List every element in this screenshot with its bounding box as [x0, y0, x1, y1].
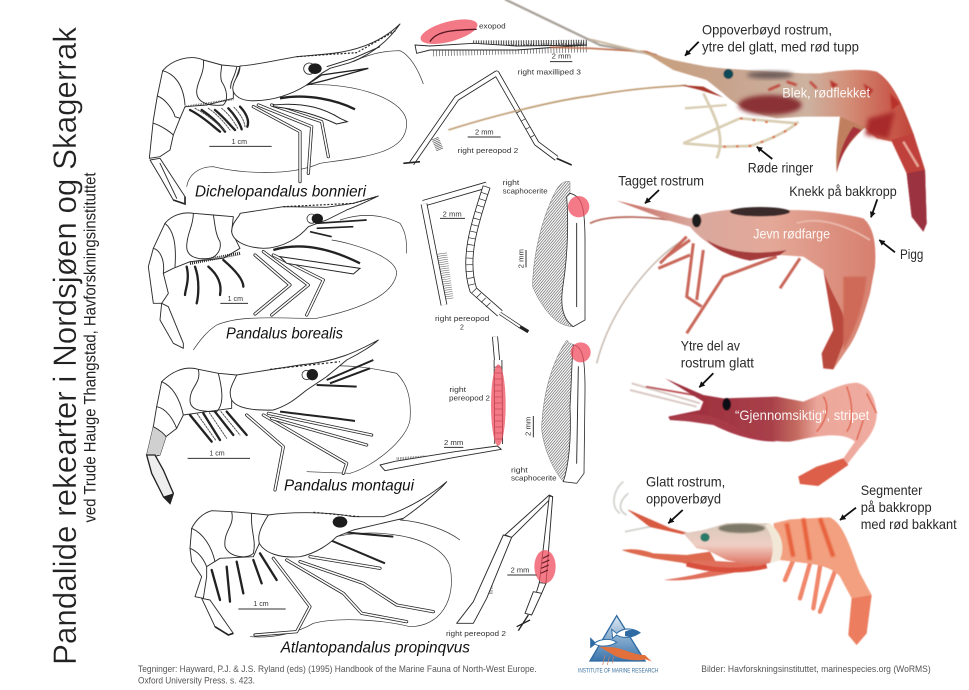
drawing: Pandalus montagui	[147, 340, 410, 503]
appendage: right pereopod 2 (P. montagui): pereopod 2	[449, 396, 490, 403]
species name: Atlantopandalus propinqvus: Atlantopandalus propinqvus	[280, 640, 470, 657]
appendage: right scaphocerite (P. borealis): right	[503, 180, 519, 187]
drawing: Pandalus borealis: 1 cm	[228, 296, 243, 303]
appendage: right pereopod 2 (D. bonnieri): 2 mm	[475, 129, 494, 136]
label: Glatt rostrum, oppoverbøyd: Glatt rostrum,	[646, 474, 725, 490]
appendage: right pereopod 2 (D. bonnieri)	[403, 73, 572, 165]
appendage: right maxilliped 3 with exopod: right maxilliped 3	[518, 69, 581, 76]
appendage: right scaphocerite (P. montagui)	[511, 340, 591, 483]
appendage: right pereopod 2 (P. montagui)	[380, 337, 506, 471]
label: Segmenter på bakkropp med rød bakkant: med rød bakkant	[861, 516, 957, 532]
photo: A. propinqvus shrimp	[614, 482, 872, 645]
appendage: right maxilliped 3 with exopod: exopod	[479, 24, 506, 31]
label: Ytre del av rostrum glatt: Ytre del av	[681, 338, 740, 354]
logo: Institute of Marine Research	[578, 616, 658, 674]
label: Røde ringer: Røde ringer	[748, 160, 814, 176]
arrow: rostrum D. bonnieri	[685, 42, 699, 56]
appendage: right scaphocerite (P. montagui): scaphocerite	[511, 475, 557, 482]
arrow: Røde ringer	[757, 147, 772, 159]
appendage: right scaphocerite (P. montagui): 2 mm	[526, 416, 533, 436]
label: rostrum D. bonnieri: Oppoverbøyd rostrum,	[702, 22, 832, 38]
appendage: right pereopod 2 (A. propinqvus)	[446, 495, 556, 638]
appendage: right scaphocerite (P. borealis): 2 mm	[518, 249, 525, 268]
appendage: right pereopod 2 (P. borealis): right pereopod	[435, 316, 489, 323]
appendage: right scaphocerite (P. borealis): scaphocerite	[503, 188, 548, 195]
credit: drawings	[138, 664, 537, 687]
credit: drawings: Oxford University Press. s. 423.	[138, 676, 255, 687]
species name: Dichelopandalus bonnieri: Dichelopandalus bonnieri	[195, 184, 366, 201]
photo: P. montagui shrimp	[630, 378, 877, 486]
label: Tagget rostrum: Tagget rostrum	[618, 173, 704, 189]
subtitle: author: ved Trude Hauge Thangstad, Havforskningsinstituttet	[80, 172, 100, 522]
drawing: Atlantopandalus propinqvus	[190, 482, 460, 637]
drawing: Dichelopandalus bonnieri: 1 cm	[232, 139, 247, 146]
label: Segmenter på bakkropp med rød bakkant: på bakkropp	[861, 499, 932, 515]
label: rostrum D. bonnieri: ytre del glatt, med rød tupp	[702, 38, 859, 54]
title: Pandalide rekearter i Nordsjøen og Skagerrak	[47, 26, 83, 665]
label: rostrum D. bonnieri	[702, 22, 859, 54]
label: Blek, rødflekket: Blek, rødflekket	[782, 84, 870, 100]
appendage: right pereopod 2 (A. propinqvus): 2 mm	[511, 567, 530, 574]
label: Glatt rostrum, oppoverbøyd	[646, 474, 725, 507]
appendage: right pereopod 2 (P. montagui): 2 mm	[444, 440, 464, 447]
appendage: right pereopod 2 (P. montagui): right	[449, 387, 466, 394]
appendage: right scaphocerite (P. montagui): right	[511, 467, 528, 474]
label: Segmenter på bakkropp med rød bakkant: Segmenter	[861, 482, 923, 498]
arrow: Tagget rostrum	[645, 190, 659, 203]
arrow: rostrum P. montagui	[699, 373, 713, 387]
species name: Pandalus montagui: Pandalus montagui	[284, 478, 414, 495]
drawing: Pandalus borealis	[148, 196, 407, 350]
logo: Institute of Marine Research: INSTITUTE OF MARINE RESEARCH	[578, 668, 658, 674]
photo: P. borealis shrimp	[590, 201, 875, 369]
photo: D. bonnieri shrimp	[448, 0, 927, 232]
label: Knekk på bakkropp: Knekk på bakkropp	[789, 183, 897, 199]
appendage: right maxilliped 3 with exopod	[415, 14, 587, 76]
appendage: right pereopod 2 (P. borealis): 2 mm	[443, 212, 462, 219]
drawing: Atlantopandalus propinqvus: 1 cm	[253, 601, 269, 608]
label: Jevn rødfarge: Jevn rødfarge	[753, 226, 830, 242]
appendage: right pereopod 2 (P. borealis)	[423, 185, 528, 332]
arrow: segmenter	[840, 508, 856, 520]
label: Ytre del av rostrum glatt: rostrum glatt	[681, 354, 754, 370]
credit: photos: Bilder: Havforskningsinstituttet, marinespecies.org (WoRMS)	[701, 664, 931, 675]
arrow: Knekk på bakkropp	[871, 199, 877, 217]
appendage: right maxilliped 3 with exopod: 2 mm	[552, 53, 571, 60]
arrow: rostrum A. propinqvus	[668, 510, 683, 523]
label: Pigg: Pigg	[900, 246, 923, 262]
drawing: Dichelopandalus bonnieri	[149, 24, 423, 204]
label: Ytre del av rostrum glatt	[681, 338, 754, 370]
appendage: right scaphocerite (P. borealis)	[503, 180, 589, 327]
label: Gjennomsiktig, stripet: “Gjennomsiktig”, stripet	[735, 407, 869, 423]
appendage: right pereopod 2 (D. bonnieri): right pereopod 2	[458, 148, 518, 155]
appendage: right pereopod 2 (P. borealis): 2	[460, 324, 464, 331]
credit: drawings: Tegninger: Hayward, P.J. & J.S. Ryland (eds) (1995) Handbook of the Marine Fauna of North-West Europe.	[138, 664, 537, 675]
appendage: right pereopod 2 (A. propinqvus): right pereopod 2	[446, 631, 506, 638]
label: Glatt rostrum, oppoverbøyd: oppoverbøyd	[646, 491, 721, 507]
label: Segmenter på bakkropp med rød bakkant	[861, 482, 957, 532]
drawing: Pandalus montagui: 1 cm	[209, 451, 225, 458]
arrow: Pigg	[879, 240, 895, 252]
species name: Pandalus borealis: Pandalus borealis	[226, 325, 343, 342]
